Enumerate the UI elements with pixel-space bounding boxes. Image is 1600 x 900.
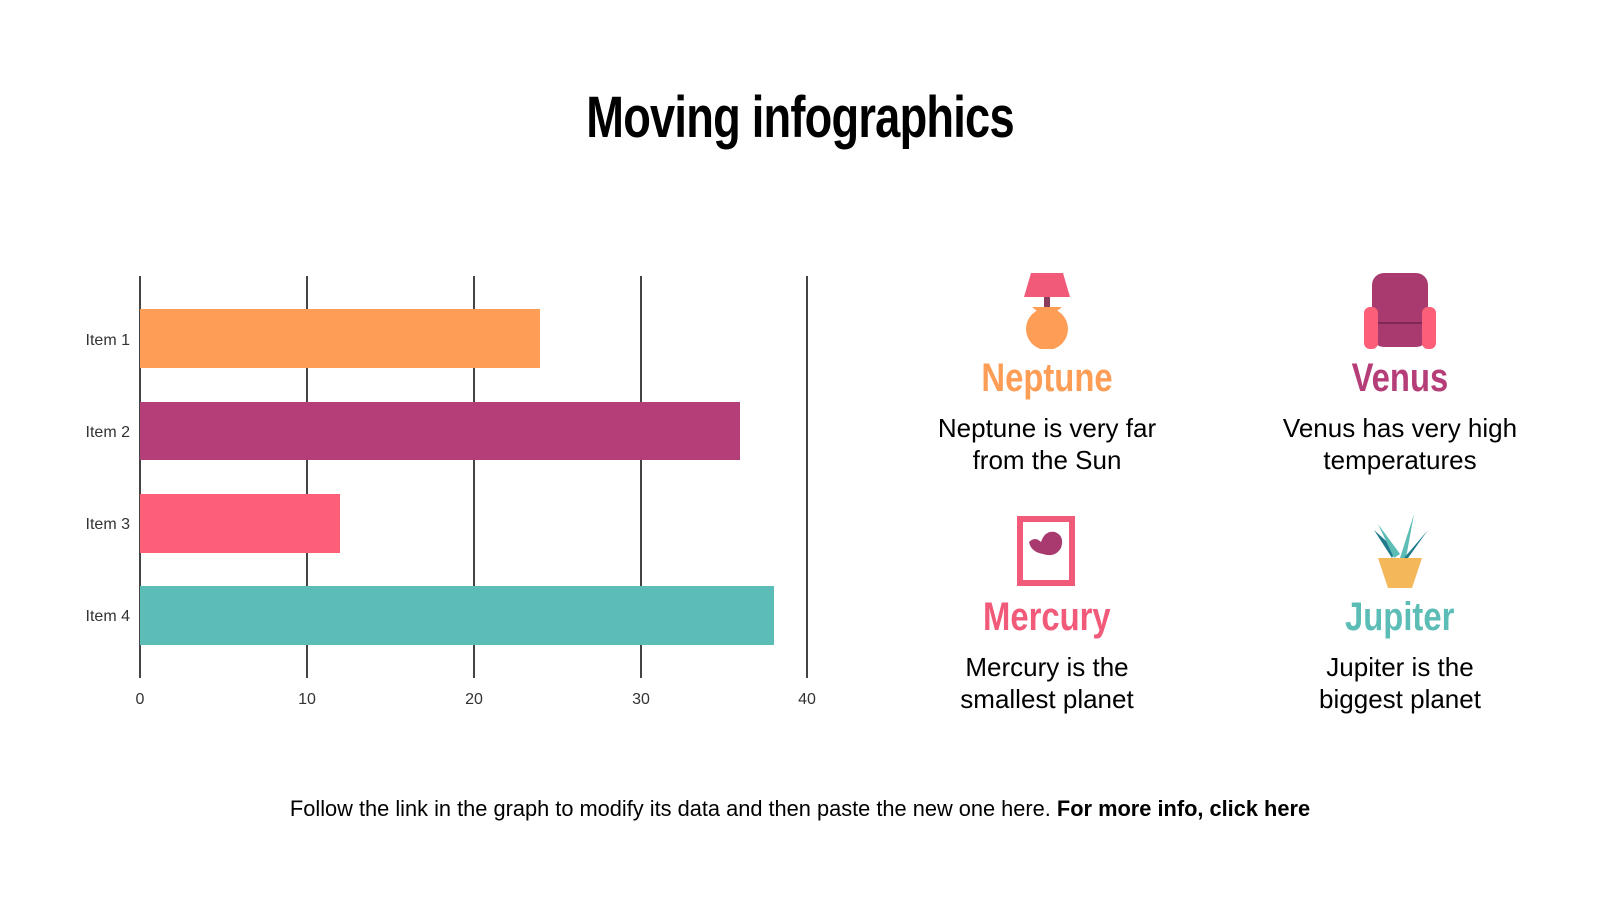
item: Jupiter (1319, 514, 1481, 714)
axis labels: 40 (798, 691, 816, 708)
title: Moving infographics (586, 85, 1014, 150)
item: Jupiter: biggest planet (1319, 684, 1481, 714)
category labels (86, 332, 130, 625)
item: Mercury: Mercury (983, 595, 1111, 639)
item: Mercury (960, 516, 1134, 714)
bar chart (86, 276, 816, 708)
item: Mercury: Mercury is the (965, 652, 1129, 682)
footer note: Follow the link in the graph to modify its data and then paste the new one here. For more info, click here (290, 796, 1310, 821)
item: Jupiter: Jupiter is the (1326, 652, 1474, 682)
item: Mercury: smallest planet (960, 684, 1134, 714)
category labels: Item 3 (86, 516, 130, 533)
axis labels: 30 (632, 691, 650, 708)
icon: lamp (1024, 273, 1070, 349)
icon: frame (1017, 516, 1075, 586)
category labels: Item 1 (86, 332, 130, 349)
item: Venus: Venus (1352, 356, 1448, 400)
item: Venus (1283, 273, 1517, 475)
item: Neptune: Neptune is very far (938, 413, 1156, 443)
item: Jupiter: Jupiter (1345, 595, 1455, 639)
axis labels: 10 (298, 691, 316, 708)
bars (140, 309, 774, 645)
axis labels: 20 (465, 691, 483, 708)
icon: armchair (1364, 273, 1436, 349)
category labels: Item 2 (86, 424, 130, 441)
axis labels: 0 (136, 691, 145, 708)
category labels: Item 4 (86, 608, 130, 625)
item: Neptune (938, 273, 1156, 475)
axis labels (136, 691, 816, 708)
icon: plant (1374, 514, 1428, 588)
item: Venus: Venus has very high (1283, 413, 1517, 443)
item: Venus: temperatures (1323, 445, 1477, 475)
item: Neptune: from the Sun (973, 445, 1121, 475)
item: Neptune: Neptune (981, 356, 1113, 400)
